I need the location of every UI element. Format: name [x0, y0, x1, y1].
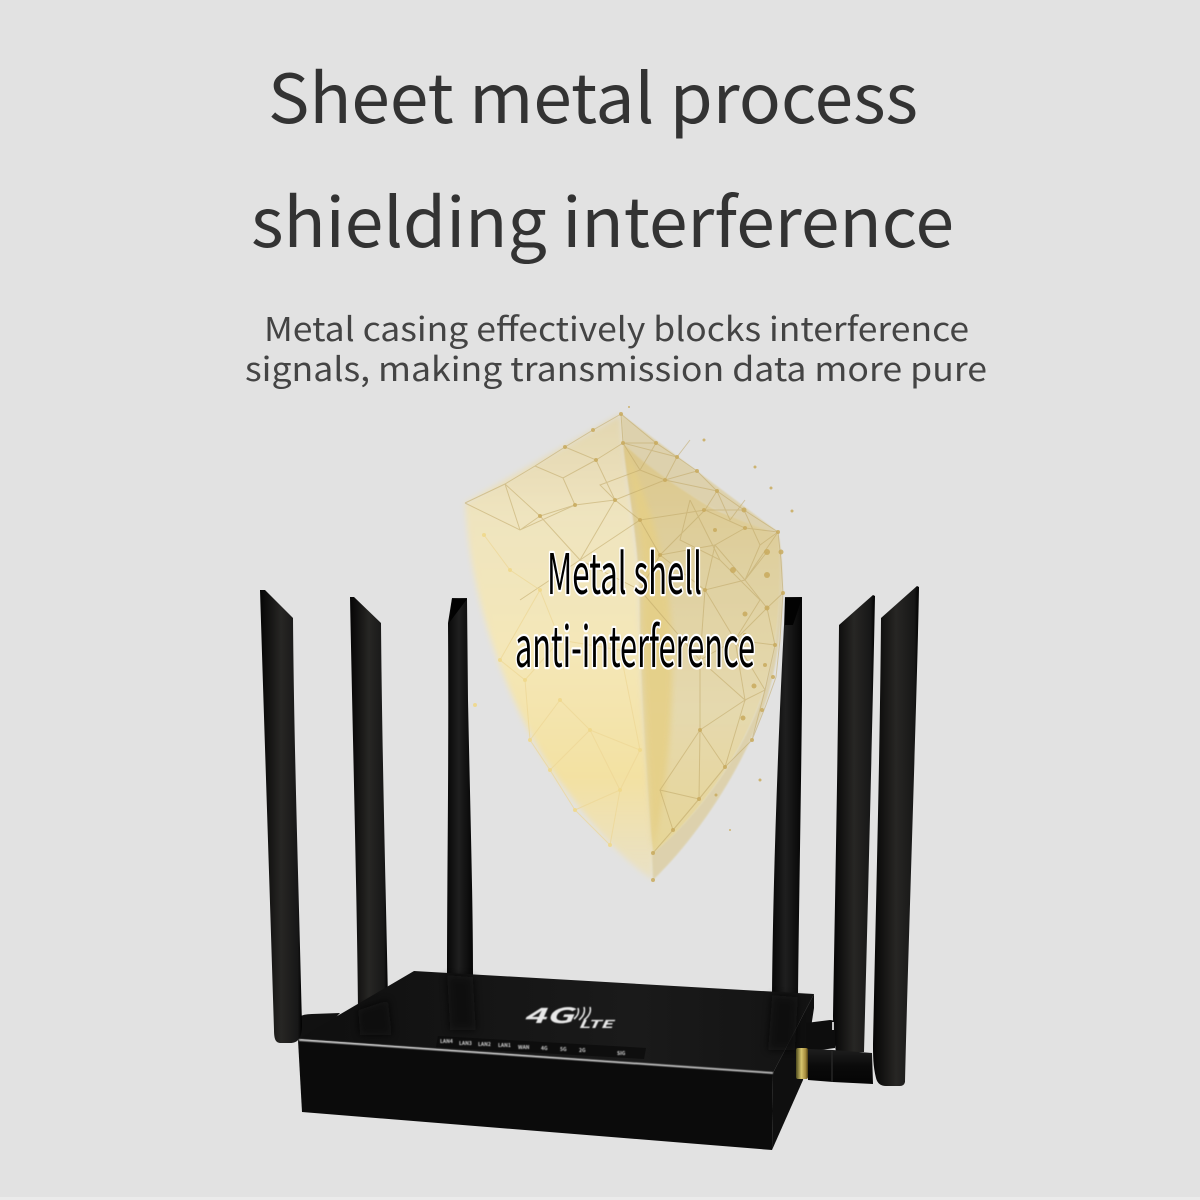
top face — [298, 971, 814, 1073]
shield: right inner facet — [623, 443, 780, 853]
LED panel — [436, 1036, 646, 1059]
front edge highlight — [299, 1040, 773, 1073]
4G LTE logo: 4G — [523, 1000, 577, 1030]
description text — [245, 303, 987, 391]
description text: signals, making transmission data more pure — [245, 343, 987, 391]
title: Sheet metal process — [268, 44, 918, 143]
connector highlight — [832, 1022, 834, 1030]
gold nut — [796, 1048, 808, 1079]
shield: centre fold shading — [624, 445, 672, 850]
shield: pale mesh on lower left — [484, 535, 640, 845]
front face — [298, 1040, 773, 1150]
LED panel: SIG — [617, 1050, 626, 1057]
callout: metal shell anti-interference: anti-interference — [515, 603, 755, 684]
LED panel: LAN3 — [459, 1040, 472, 1047]
callout: metal shell anti-interference: Metal shell — [547, 530, 702, 611]
LED panel: 4G — [541, 1045, 548, 1052]
callout: metal shell anti-interference — [515, 530, 755, 684]
LED panel: WAN — [518, 1044, 530, 1051]
shield graphic — [465, 406, 794, 882]
upper connector — [806, 1020, 835, 1052]
antenna 4 — [772, 597, 802, 995]
4G LTE logo: LTE — [578, 1016, 617, 1032]
antenna 2 — [350, 597, 388, 1010]
shield: left facet — [465, 414, 655, 880]
antenna 1 with elbow — [260, 590, 340, 1043]
4G LTE logo — [523, 1000, 617, 1032]
lower connector — [808, 1049, 873, 1084]
antenna 5 — [833, 595, 875, 1052]
title — [251, 44, 954, 267]
LED panel: 2G — [579, 1047, 586, 1054]
shield: pale nodes on left side — [473, 533, 642, 847]
connector seam — [831, 1051, 833, 1082]
LED panel: 5G — [560, 1046, 567, 1053]
shield: outer rim — [621, 414, 783, 880]
antenna 3 — [447, 598, 473, 975]
LED panel: LAN1 — [498, 1042, 511, 1049]
bottom edge strip — [0, 1197, 1200, 1200]
shield: mesh nodes — [538, 406, 794, 882]
antenna 6 — [873, 586, 919, 1086]
title: shielding interference — [251, 168, 954, 267]
side face — [772, 994, 814, 1150]
antenna reflections on top face — [358, 975, 798, 1050]
shield: polygon mesh — [465, 414, 783, 853]
LED panel: LAN2 — [478, 1041, 491, 1048]
router body — [298, 971, 814, 1150]
LED panel: LAN4 — [440, 1038, 453, 1045]
description text: Metal casing effectively blocks interference — [264, 303, 969, 351]
rear connectors — [796, 1020, 873, 1084]
